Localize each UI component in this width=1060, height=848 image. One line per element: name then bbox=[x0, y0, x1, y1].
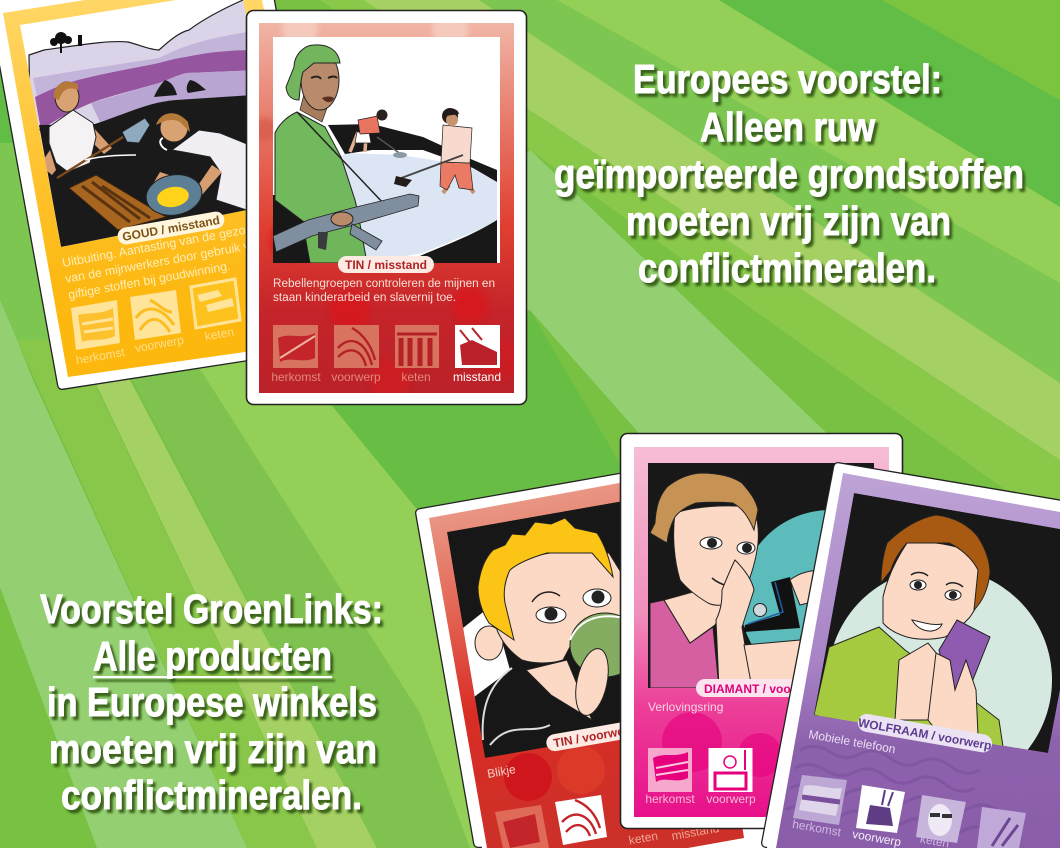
text: tungsten icon labels: herkomst bbox=[791, 817, 843, 839]
text: tin voorwerp card icon labels: misstand bbox=[670, 821, 720, 843]
text: gold icon labels: voorwerp bbox=[134, 333, 185, 355]
label: DIAMANT / voorwerp bbox=[696, 679, 856, 697]
heading: Voorstel GroenLinks bbox=[40, 586, 383, 818]
text: Verlovingsring: Verlovingsring bbox=[648, 700, 723, 714]
text: Mobiele telefoon: Mobiele telefoon bbox=[807, 727, 897, 756]
sluice bbox=[69, 175, 166, 230]
illustration: woman with engagement ring bbox=[648, 463, 874, 688]
text: tin icon labels bbox=[271, 370, 501, 384]
illustration: soldier and child miners bbox=[273, 37, 500, 263]
icon: tin voorwerp tilted bbox=[555, 795, 607, 845]
miner 2 bbox=[173, 130, 246, 210]
label: TIN / voorwerp: TIN / voorwerp bbox=[552, 722, 637, 750]
panel: red tin card (misstand) bbox=[246, 10, 526, 404]
label: DIAMANT / voorwerp: DIAMANT / voorwerp bbox=[704, 682, 823, 696]
icon: gold voorwerp bbox=[130, 290, 181, 340]
miner 1 bbox=[44, 128, 112, 175]
illustration: gold miners bbox=[20, 0, 246, 247]
text: tin voorwerp card icon labels: keten bbox=[628, 829, 659, 848]
label: GOUD / misstand: GOUD / misstand bbox=[121, 213, 221, 244]
text: tin icon labels: herkomst bbox=[271, 370, 321, 384]
icon: tungsten keten bbox=[916, 795, 966, 843]
text: gold description bbox=[61, 222, 253, 302]
icon: tin keten bbox=[395, 325, 439, 368]
text: gold description: Uitbuiting. Aantasting van de gezon bbox=[61, 222, 253, 270]
heading: Europees voorstel: moeten vrij zijn van bbox=[626, 198, 951, 244]
icon: tungsten misstand bbox=[977, 807, 1026, 848]
text: gold icon labels: herkomst bbox=[75, 345, 126, 367]
panel: gold card bbox=[0, 0, 277, 390]
heading: Voorstel GroenLinks: Voorstel GroenLinks: bbox=[40, 586, 383, 632]
icon: tin voorwerp bbox=[334, 325, 379, 368]
icon: diamond voorwerp bbox=[708, 748, 752, 792]
icon: tin herkomst flag bbox=[273, 325, 318, 368]
text: diamond icon labels bbox=[645, 792, 756, 806]
icon: gold herkomst bbox=[71, 300, 120, 350]
illustration: person with mobile phone bbox=[814, 493, 1060, 753]
heading: Voorstel GroenLinks: conflictmineralen. bbox=[61, 772, 362, 818]
text: gold icon labels bbox=[75, 325, 235, 367]
text: gold icon labels: keten bbox=[204, 325, 235, 344]
heading: Europees voorstel: Europees voorstel: bbox=[633, 56, 942, 102]
gold pan bbox=[146, 175, 202, 216]
text: gold description: van de mijnwerkers door gebruik v bbox=[64, 239, 252, 286]
text: diamond icon labels: herkomst bbox=[645, 792, 695, 806]
text: tin description bbox=[273, 276, 495, 304]
icon: tungsten voorwerp bbox=[856, 785, 905, 833]
panel: pink diamond card bbox=[620, 434, 920, 828]
heading: Europees voorstel: Alleen ruw bbox=[700, 104, 875, 150]
text: Blikje: Blikje bbox=[486, 762, 517, 781]
label: TIN / voorwerp bbox=[545, 718, 646, 752]
icon: tin misstand bbox=[455, 325, 500, 368]
child 1 bbox=[350, 110, 407, 158]
heading: Voorstel GroenLinks: moeten vrij zijn van bbox=[49, 726, 377, 772]
heading: Voorstel GroenLinks: in Europese winkels bbox=[47, 679, 377, 725]
icon: diamond herkomst bbox=[648, 748, 692, 792]
text: tin icon labels: voorwerp bbox=[331, 370, 381, 384]
icon: gold keten bbox=[191, 279, 240, 328]
text: diamond icon labels: voorwerp bbox=[706, 792, 756, 806]
illustration: boy drinking from a can bbox=[447, 502, 620, 758]
panel: red tin card (voorwerp) bbox=[420, 464, 770, 848]
text: tin description: Rebellengroepen controleren de mijnen en bbox=[273, 276, 495, 290]
text: gold description: giftige stoffen bij goudwinning. bbox=[67, 259, 231, 302]
heading: Europees voorstel: conflictmineralen. bbox=[638, 245, 936, 291]
text: tungsten icon labels bbox=[791, 817, 950, 848]
label: WOLFRAAM / voorwerp: WOLFRAAM / voorwerp bbox=[857, 716, 993, 753]
text: tin icon labels: keten bbox=[401, 370, 431, 384]
icon: tree on horizon bbox=[50, 32, 82, 53]
text: tin icon labels: misstand bbox=[453, 370, 501, 384]
heading: Europees voorstel bbox=[554, 56, 1024, 291]
soldier bbox=[273, 45, 419, 263]
label: TIN / misstand: TIN / misstand bbox=[345, 258, 427, 272]
heading: Voorstel GroenLinks: Alle producten bbox=[93, 633, 332, 679]
child 2 bbox=[394, 108, 474, 193]
icon: tin flag tilted bbox=[495, 805, 549, 848]
text: tin voorwerp card icon labels bbox=[628, 821, 720, 848]
text: tin description: staan kinderarbeid en slavernij toe. bbox=[273, 290, 456, 304]
panel: purple tungsten card bbox=[766, 467, 1060, 848]
icon: tungsten herkomst bbox=[793, 775, 847, 825]
